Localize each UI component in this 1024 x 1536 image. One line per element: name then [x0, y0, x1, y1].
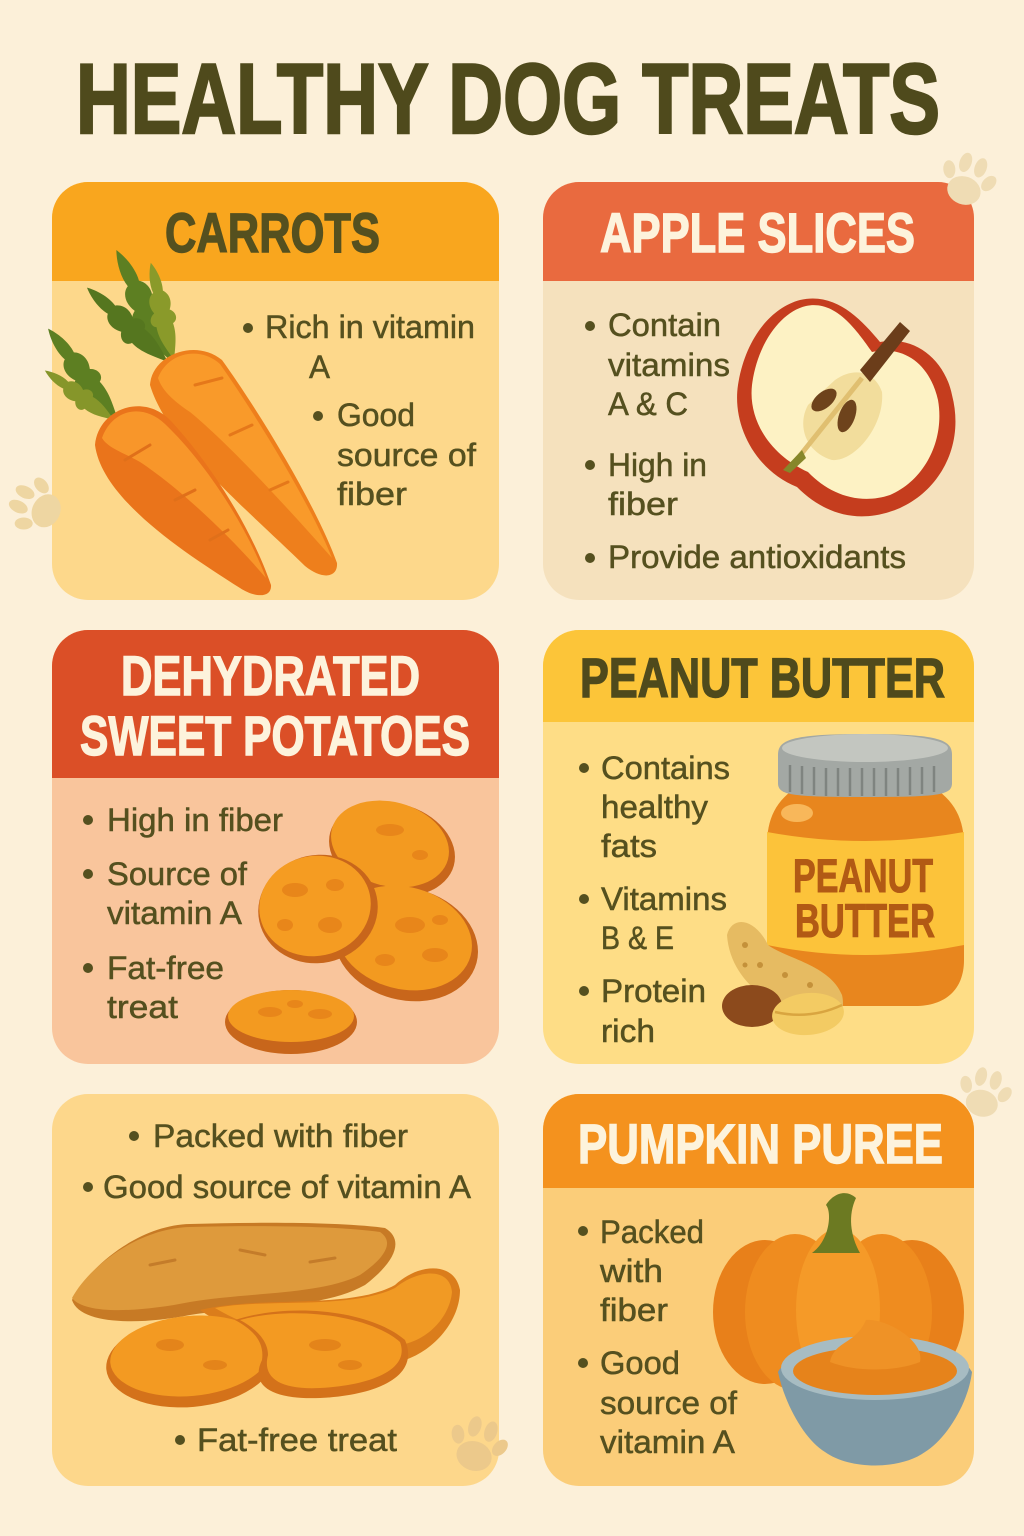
- peanut butter bullets: healthy: [601, 789, 708, 825]
- sweet potatoes heading: [80, 644, 470, 767]
- icon: pumpkin and bowl: [713, 1193, 972, 1466]
- sweet potato bullets: Fat-free treat: [197, 1422, 397, 1458]
- peanut butter header: [543, 630, 974, 722]
- pumpkin bullets: Good: [600, 1345, 680, 1381]
- peanut butter bullets: fats: [601, 828, 657, 864]
- peanut butter bullets: Contains: [601, 750, 730, 786]
- icon: peanuts: [722, 922, 846, 1038]
- icon: paw bottom: [439, 1409, 516, 1480]
- sweet potatoes bullets: Source of: [107, 856, 247, 892]
- sweet potatoes bullets: High in fiber: [107, 802, 283, 838]
- apple bullets: Provide antioxidants: [608, 539, 906, 575]
- peanut butter bullets: rich: [601, 1013, 655, 1049]
- peanut butter bullets: [579, 750, 730, 1049]
- sweet potatoes bullets: Fat-free: [107, 950, 224, 986]
- icon: peanut butter jar: [767, 734, 964, 1006]
- panel: apple slices: [543, 182, 974, 600]
- carrots bullets: fiber: [337, 476, 407, 512]
- pumpkin bullets: [578, 1214, 737, 1460]
- pumpkin bullets: source of: [600, 1385, 737, 1421]
- sweet potato bullets: [83, 1118, 472, 1458]
- pumpkin bullets: Packed: [600, 1214, 704, 1250]
- pumpkin header: [543, 1094, 974, 1188]
- icon: carrots: [35, 244, 337, 595]
- icon: whole sweet potatoes: [72, 1223, 460, 1414]
- sweet potatoes header: [52, 630, 499, 778]
- apple bullets: vitamins: [608, 347, 730, 383]
- apple bullets: [585, 307, 906, 575]
- panel: sweet potatoes: [52, 1094, 499, 1486]
- pumpkin bullets: vitamin A: [600, 1424, 736, 1460]
- carrots bullets: Good: [337, 397, 415, 433]
- sweet potatoes bullets: [83, 802, 283, 1025]
- apple header: [543, 182, 974, 281]
- apple bullets: A & C: [608, 386, 688, 422]
- icon: peanut butter jar: BUTTER: [795, 894, 935, 947]
- icon: apple half: [737, 299, 955, 516]
- panel: carrots: [35, 182, 499, 600]
- carrots bullets: source of: [337, 437, 476, 473]
- pumpkin bullets: fiber: [600, 1292, 668, 1328]
- icon: paw left: [0, 468, 72, 544]
- peanut butter bullets: Vitamins: [601, 881, 727, 917]
- sweet potatoes heading: DEHYDRATED: [121, 644, 420, 707]
- sweet potatoes bullets: vitamin A: [107, 895, 243, 931]
- apple bullets: Contain: [608, 307, 721, 343]
- panel: peanut butter: [543, 630, 974, 1064]
- peanut butter bullets: B & E: [601, 920, 674, 956]
- apple heading: APPLE SLICES: [600, 201, 915, 264]
- panel: pumpkin puree: [543, 1094, 974, 1486]
- sweet potatoes bullets: treat: [107, 989, 178, 1025]
- icon: paw top right: [931, 145, 1005, 214]
- carrots header: [52, 182, 499, 281]
- carrots heading: CARROTS: [165, 201, 380, 264]
- carrots bullets: A: [309, 349, 331, 385]
- icon: peanut butter jar: PEANUT: [793, 849, 933, 902]
- icon: dried sweet potato slices: [225, 788, 491, 1054]
- sweet potato bullets: Good source of vitamin A: [103, 1169, 472, 1205]
- carrots bullets: [243, 309, 476, 512]
- apple bullets: High in: [608, 447, 707, 483]
- carrots bullets: Rich in vitamin: [265, 309, 475, 345]
- apple bullets: fiber: [608, 486, 678, 522]
- peanut butter bullets: Protein: [601, 973, 706, 1009]
- pumpkin bullets: with: [599, 1253, 663, 1289]
- sweet potatoes heading: SWEET POTATOES: [80, 704, 470, 767]
- panel: dehydrated sweet potatoes: [52, 630, 499, 1064]
- icon: paw right middle: [951, 1062, 1019, 1124]
- sweet potato bullets: Packed with fiber: [153, 1118, 408, 1154]
